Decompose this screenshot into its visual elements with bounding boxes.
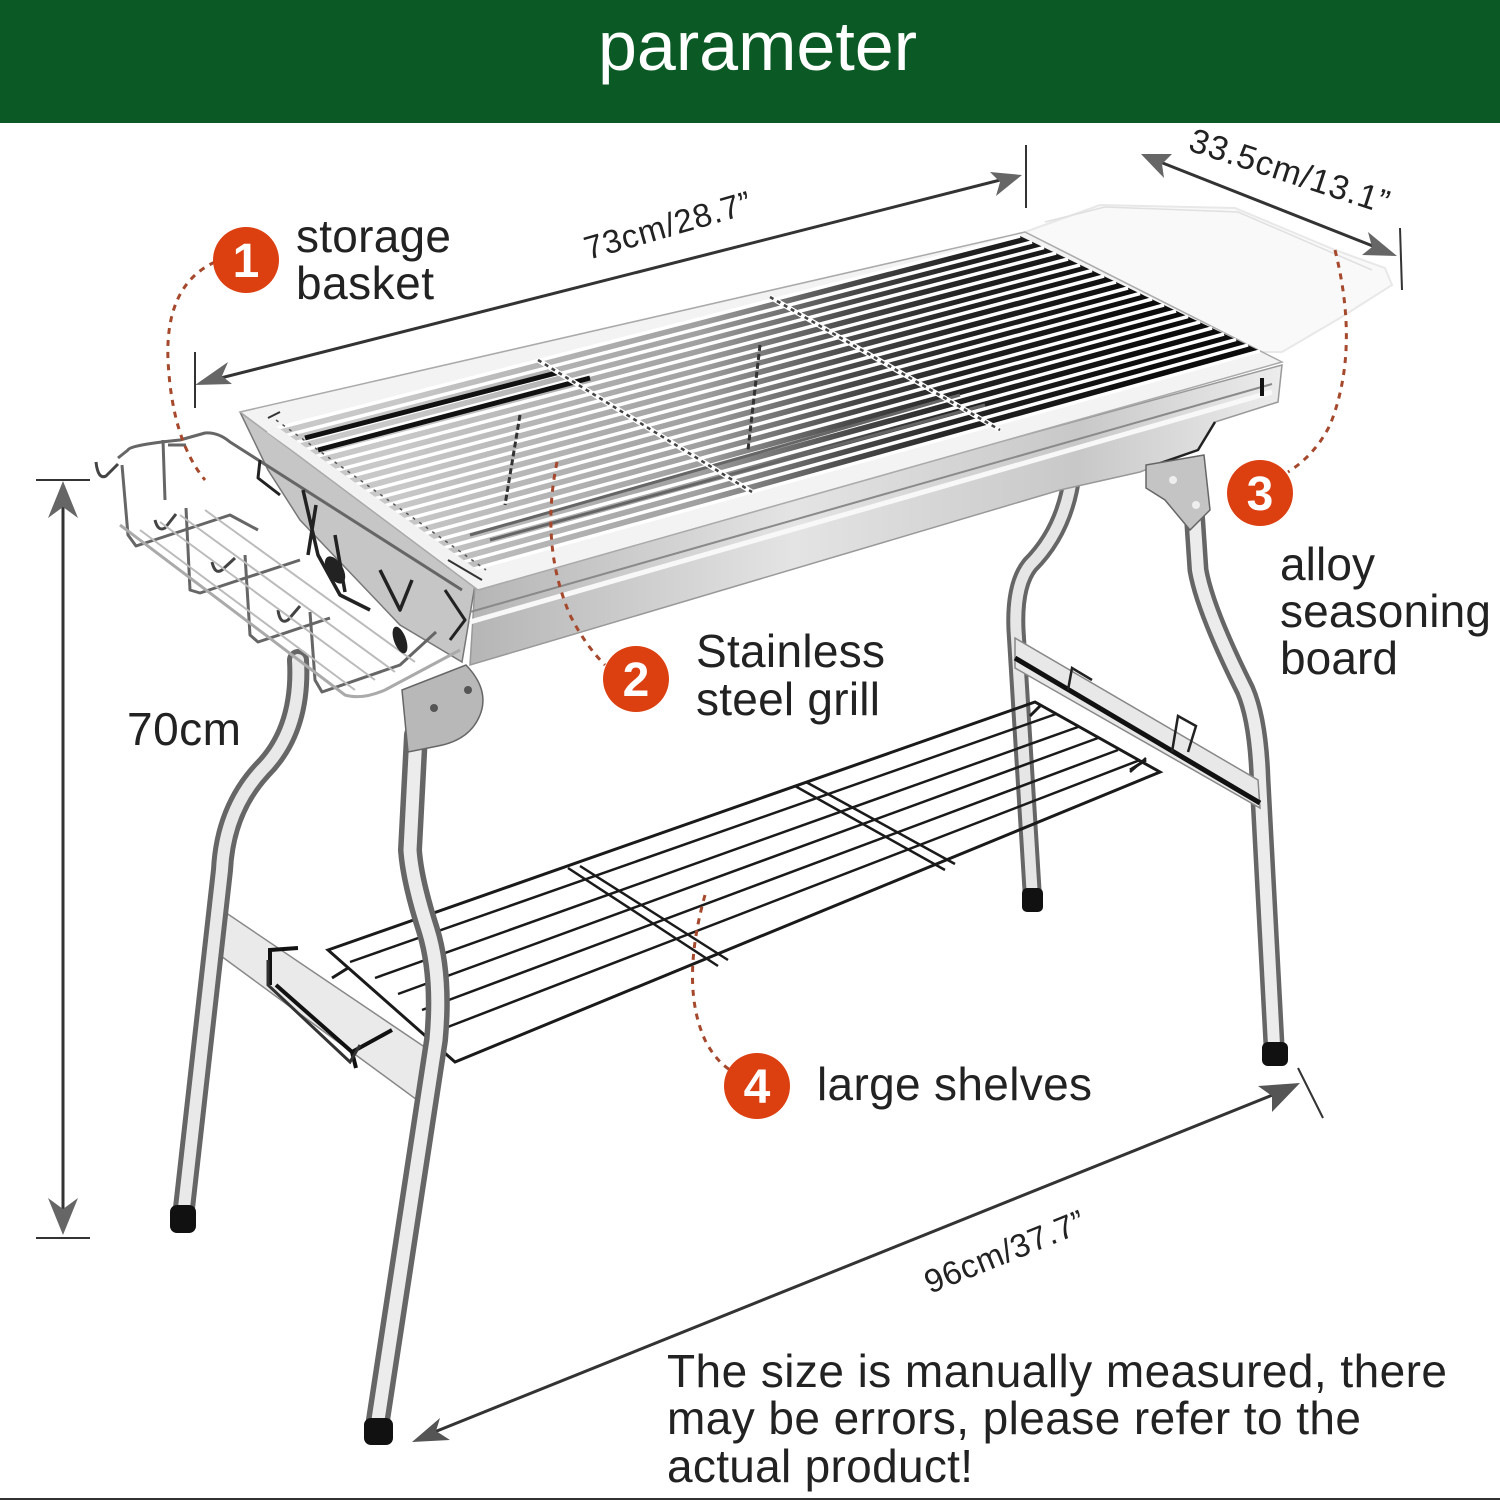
left cross bar with handle: [206, 902, 432, 1108]
callout 3: alloy seasoning board: seasoning: [1280, 585, 1491, 637]
back feet: [1022, 888, 1288, 1066]
large shelf: [328, 702, 1160, 1062]
callout 3: alloy seasoning board: 3: [1247, 468, 1273, 521]
callout 2: stainless steel grill: [603, 625, 885, 725]
dimension: board width 33.5cm: 33.5cm/13.1”: [1185, 121, 1394, 222]
dashed leader lines: [168, 250, 1346, 1070]
callout 1: storage basket: storage: [296, 210, 451, 262]
trough rim: [240, 232, 1282, 590]
disclaimer note: The size is manually measured, there: [667, 1345, 1447, 1397]
disclaimer note: [667, 1345, 1447, 1492]
callout 4: large shelves: 4: [744, 1061, 771, 1114]
callout 2: stainless steel grill: 2: [623, 654, 649, 707]
callout 4: large shelves: large shelves: [817, 1058, 1092, 1110]
back legs: [1016, 475, 1274, 1045]
title: parameter: [598, 7, 917, 85]
right cross bar with handle: [1015, 638, 1260, 808]
seasoning board: [1025, 205, 1392, 352]
callout 3: alloy seasoning board: board: [1280, 632, 1398, 684]
callout 4: large shelves: [724, 1053, 1092, 1119]
dimension: depth 96cm: [412, 1068, 1323, 1442]
rack left bar: [270, 428, 480, 578]
disclaimer note: actual product!: [667, 1440, 973, 1492]
callout 1: storage basket: [213, 210, 451, 309]
dimension: length 73cm: 73cm/28.7”: [580, 184, 755, 267]
storage basket: [96, 433, 465, 697]
leg brackets: [402, 455, 1210, 752]
grill trough: [240, 232, 1282, 665]
grill rack: [270, 236, 1260, 570]
dimension: height 70cm: [36, 480, 241, 1238]
dimension: height 70cm: 70cm: [127, 703, 241, 755]
callout 2: stainless steel grill: steel grill: [696, 673, 880, 725]
dimension: board width 33.5cm: [1141, 121, 1402, 290]
callout 3: alloy seasoning board: [1227, 460, 1491, 684]
disclaimer note: may be errors, please refer to the: [667, 1392, 1361, 1444]
callout 1: storage basket: basket: [296, 257, 434, 309]
dimension: depth 96cm: 96cm/37.7”: [919, 1203, 1090, 1300]
header band: [0, 0, 1500, 123]
callout 2: stainless steel grill: Stainless: [696, 625, 885, 677]
dimension: length 73cm: [195, 145, 1026, 408]
callout 1: storage basket: 1: [233, 235, 259, 288]
front feet: [170, 1205, 393, 1445]
front legs: [184, 660, 438, 1420]
callout 3: alloy seasoning board: alloy: [1280, 538, 1375, 590]
